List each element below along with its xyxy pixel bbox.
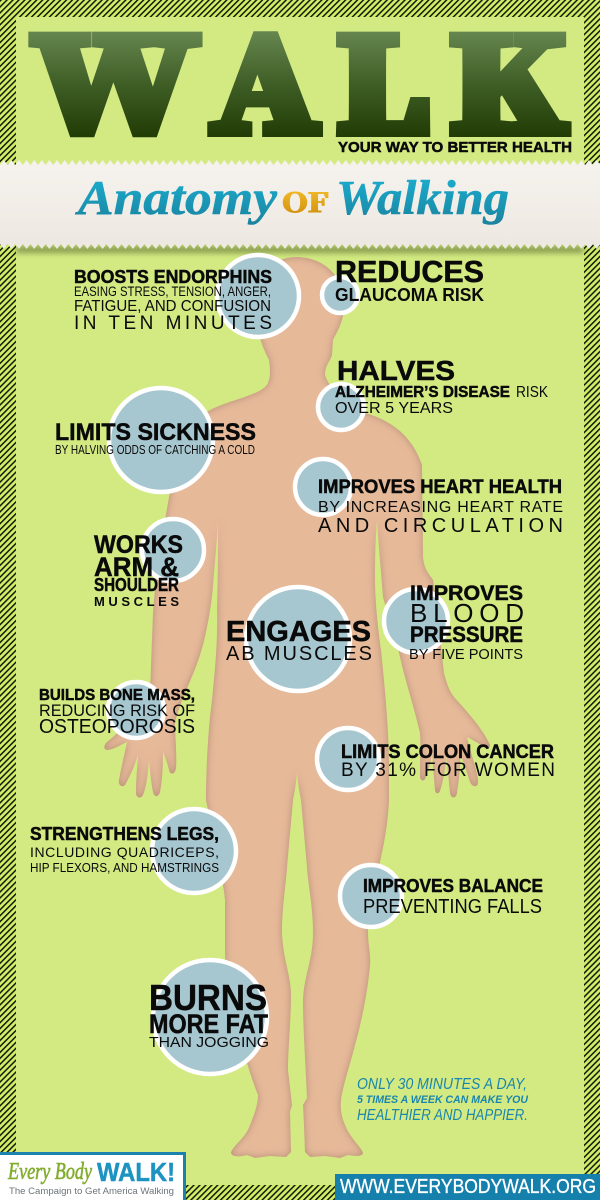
callout: halves alzheimer's risk: ALZHEIMER’S DISEASE	[335, 384, 510, 401]
subtitle: YOUR WAY TO BETTER HEALTH	[338, 139, 572, 156]
callout: engages ab muscles: AB MUSCLES	[226, 643, 372, 665]
title: WALK	[34, 0, 565, 167]
callout: reduces glaucoma risk	[335, 254, 484, 305]
callout: improves balance: PREVENTING FALLS	[363, 896, 542, 918]
callout: boosts endorphins: IN TEN MINUTES	[74, 313, 272, 334]
callout: engages ab muscles: ENGAGES	[226, 616, 371, 648]
heading: Walking: Walking	[336, 170, 509, 225]
banner: Anatomy of Walking	[0, 160, 600, 249]
callout: improves heart health: BY INCREASING HEART RATE	[318, 499, 563, 516]
callout: improves balance: IMPROVES BALANCE	[363, 876, 543, 896]
callout: limits colon cancer	[341, 742, 555, 781]
callout: halves alzheimer's risk: OVER 5 YEARS	[335, 400, 453, 417]
banner shadow	[16, 246, 584, 253]
callout: improves blood pressure: PRESSURE	[410, 622, 523, 647]
callout: limits sickness: BY HALVING ODDS OF CATCHING A COLD	[55, 443, 255, 457]
note: thirty minutes a day: ONLY 30 MINUTES A DAY,	[357, 1076, 527, 1093]
logo wordmark: Walk: WALK!	[97, 1157, 175, 1187]
callout: boosts endorphins: BOOSTS ENDORPHINS	[74, 267, 272, 287]
callout: improves blood pressure: BLOOD	[410, 598, 524, 628]
callout: improves heart health: AND CIRCULATION	[318, 515, 563, 537]
callout: halves alzheimer's risk: RISK	[516, 384, 548, 401]
callout: halves alzheimer's risk: HALVES	[337, 355, 455, 386]
note: thirty minutes a day: 5 TIMES A WEEK CAN MAKE YOU	[357, 1094, 529, 1106]
callout: boosts endorphins: FATIGUE, AND CONFUSION	[74, 298, 271, 315]
callout: engages ab muscles	[226, 616, 372, 665]
callout: works arm and shoulder muscles: ARM &	[94, 552, 179, 582]
callout: reduces glaucoma risk: REDUCES	[335, 254, 484, 289]
callout: burns more fat	[149, 977, 269, 1051]
callout: halves alzheimer's risk	[335, 355, 548, 417]
logo: Every Body Walk	[0, 1152, 186, 1200]
callout: improves heart health: IMPROVES HEART HEALTH	[318, 477, 562, 498]
callout: improves blood pressure	[409, 582, 524, 663]
heading: Anatomy: Anatomy	[75, 170, 277, 225]
callout: burns more fat: BURNS	[149, 977, 267, 1018]
callout: boosts endorphins	[74, 267, 272, 334]
callout: builds bone mass: REDUCING RISK OF	[39, 701, 195, 720]
callout: limits sickness	[55, 419, 256, 457]
callout: reduces glaucoma risk: GLAUCOMA RISK	[335, 285, 484, 305]
callout: strengthens legs: INCLUDING QUADRICEPS,	[30, 844, 219, 860]
callout: builds bone mass: BUILDS BONE MASS,	[39, 687, 195, 704]
heading: of: OF	[282, 183, 329, 220]
callout: improves blood pressure: IMPROVES	[410, 582, 523, 605]
callout: limits colon cancer: BY 31% FOR WOMEN	[341, 760, 555, 781]
callout: improves heart health	[318, 477, 563, 537]
callout: limits sickness: LIMITS SICKNESS	[55, 419, 256, 446]
callout: strengthens legs	[30, 824, 219, 875]
callout: strengthens legs: HIP FLEXORS, AND HAMSTRINGS	[30, 860, 219, 875]
callout: builds bone mass	[39, 687, 195, 738]
callout: burns more fat: MORE FAT	[149, 1009, 268, 1039]
callout: strengthens legs: STRENGTHENS LEGS,	[30, 824, 219, 844]
callout: works arm and shoulder muscles	[94, 531, 183, 609]
callout: burns more fat: THAN JOGGING	[149, 1034, 269, 1051]
highlight circles on the body	[108, 255, 448, 1074]
logo wordmark: Every Body: Every Body	[7, 1159, 92, 1185]
callout: works arm and shoulder muscles: SHOULDER	[94, 575, 179, 595]
callout: limits colon cancer: LIMITS COLON CANCER	[341, 742, 554, 763]
human body silhouette	[104, 257, 490, 1158]
callout: improves blood pressure: BY FIVE POINTS	[409, 646, 523, 663]
note: thirty minutes a day	[357, 1076, 529, 1124]
callout: builds bone mass: OSTEOPOROSIS	[39, 716, 195, 738]
callout: works arm and shoulder muscles: WORKS	[94, 531, 183, 559]
callout: boosts endorphins: EASING STRESS, TENSION, ANGER,	[74, 284, 271, 299]
logo tagline: The Campaign to Get America Walking	[9, 1186, 174, 1197]
callout: improves balance	[363, 876, 543, 918]
callout: works arm and shoulder muscles: MUSCLES	[94, 594, 179, 609]
note: thirty minutes a day: HEALTHIER AND HAPPIER.	[357, 1107, 528, 1124]
